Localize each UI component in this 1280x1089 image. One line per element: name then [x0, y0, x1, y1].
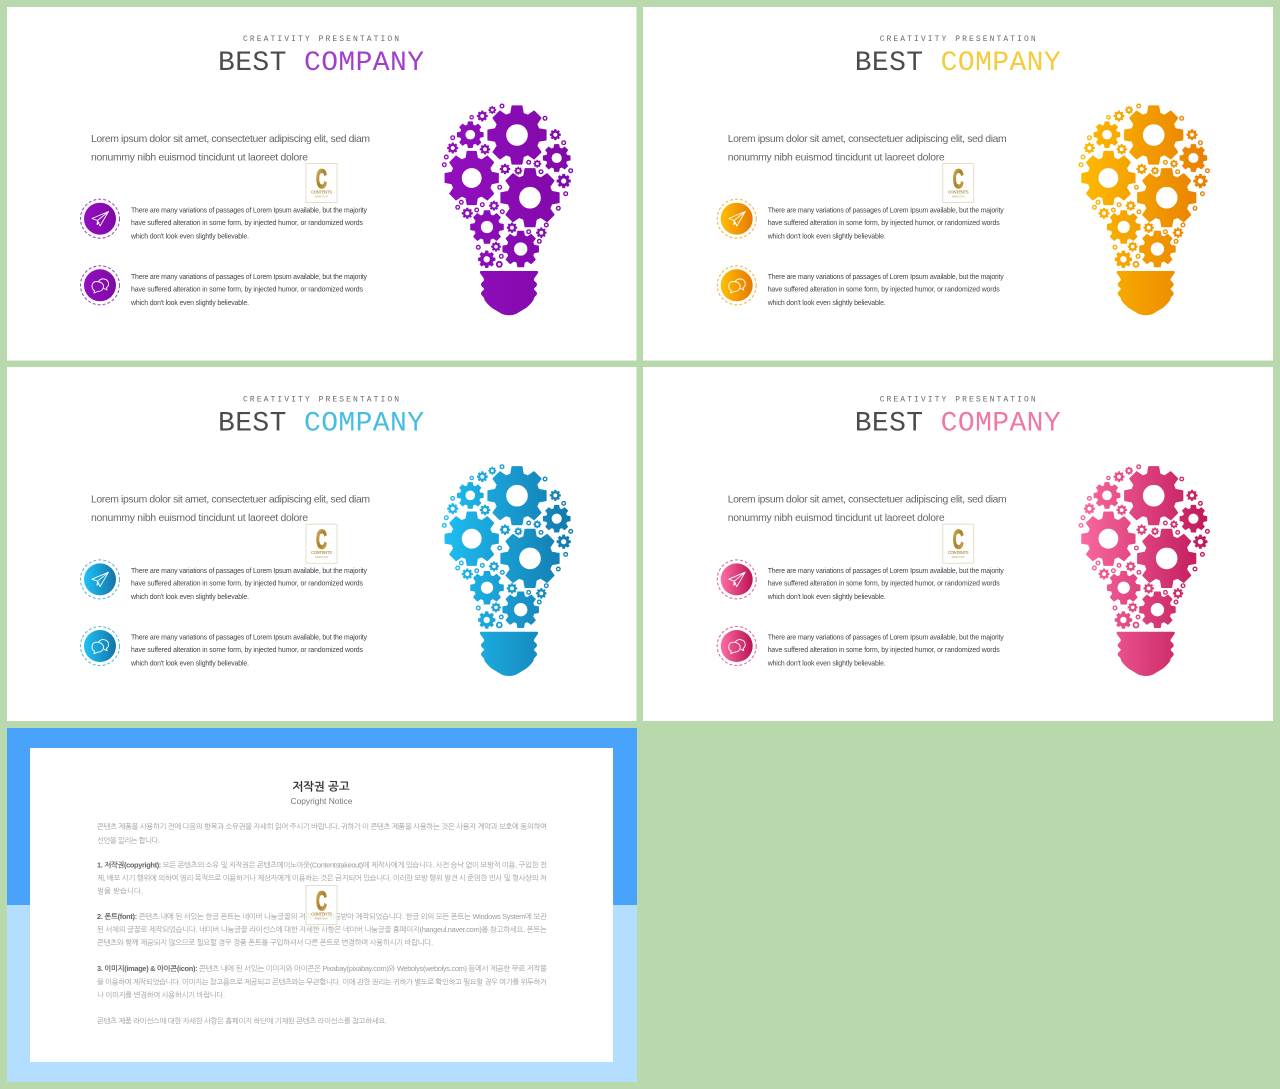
section: image and icon: 3. 이미지(image) & 아이콘(icon): 콘텐츠 내에 된 서있는 이미지와 아이콘은 Pixabay(pixabay.com)와 Webolys(webolys.com) 등에서 제공한 무료 저작물	[97, 964, 547, 973]
text block: first description: There are many variations of passages of Lorem Ipsum available, but the majority	[768, 207, 1004, 214]
section: font: 2. 폰트(font): 콘텐츠 내에 된 서있는 한글 폰트는 네이버 나눔글꼴의 저작물로 제공받아 제작되었습니다. 한글 외의 모든 폰트는 Windows System에 보관	[97, 912, 547, 921]
watermark logo: CONTENTS	[948, 190, 969, 194]
title: BEST COMPANY	[855, 48, 1061, 79]
watermark logo: C	[316, 164, 327, 194]
icon: paper plane	[80, 199, 120, 238]
slide background	[643, 367, 1273, 721]
slide background	[643, 7, 1273, 360]
intro paragraph: 콘텐츠 제품을 사용하기 전에 다음의 항목과 소유권을 자세히 읽어 주시기 바랍니다. 귀하가 이 콘텐츠 제품을 사용하는 것은 사용자 계약과 보호에 동의하여	[97, 822, 547, 831]
text block: first description: have suffered alteration in some form, by injected humor, or randomized words	[768, 220, 1000, 227]
section: copyright: 벌을 받습니다.	[97, 886, 143, 896]
lead paragraph	[91, 134, 370, 164]
notice heading: 저작권 공고	[292, 780, 350, 794]
icon: chat bubbles	[717, 626, 756, 666]
watermark logo: C	[953, 525, 964, 555]
icon: paper plane	[80, 560, 120, 599]
watermark logo: C	[316, 525, 327, 555]
watermark logo: C	[316, 886, 327, 916]
lead paragraph	[91, 495, 370, 524]
text block: second description	[130, 274, 368, 307]
intro paragraph: 선언을 알리는 합니다.	[97, 836, 160, 845]
watermark logo: CONTENTS	[311, 912, 332, 916]
text block: first description	[767, 207, 1004, 240]
lead paragraph	[728, 134, 1007, 164]
watermark logo	[306, 524, 337, 563]
title: BEST COMPANY	[855, 409, 1061, 440]
panel: copyright notice	[7, 728, 637, 1082]
text block: first description: have suffered alteration in some form, by injected humor, or randomized words	[131, 220, 364, 227]
section: font: 된 서체의 글꼴로 제작되었습니다. 네이버 나눔글꼴 라이선스에 대한 자세한 사항은 네이버 나눔글꼴 홈페이지(hangeul.naver.com)를 참고하세요. 폰트는	[97, 925, 547, 934]
text block: first description: which don't look even slightly believable.	[130, 233, 249, 240]
closing note: 콘텐츠 제품 라이선스에 대한 자세한 사항은 홈페이지 하단에 기재된 콘텐츠 라이선스를 참고하세요.	[97, 1016, 387, 1026]
notice subheading: Copyright Notice	[291, 796, 353, 806]
text block: first description: which don't look even slightly believable.	[130, 594, 249, 601]
text block: second description: have suffered alteration in some form, by injected humor, or randomized words	[768, 286, 1000, 294]
watermark logo: MAKE YOUR	[952, 194, 965, 198]
section: copyright	[97, 860, 547, 896]
text block: first description: which don't look even slightly believable.	[767, 233, 886, 240]
text block: first description: There are many variations of passages of Lorem Ipsum available, but the majority	[768, 568, 1004, 575]
panel: blue slide	[7, 367, 636, 721]
icon: chat bubbles	[80, 626, 120, 666]
watermark logo	[943, 164, 974, 202]
watermark logo: MAKE YOUR	[315, 555, 328, 559]
watermark logo: CONTENTS	[311, 190, 332, 194]
intro paragraph	[97, 822, 547, 845]
illustration: gear light bulb	[1078, 464, 1210, 676]
text block: second description: There are many variations of passages of Lorem Ipsum available, but the majority	[131, 274, 368, 281]
illustration: gear light bulb	[442, 464, 574, 676]
watermark logo: CONTENTS	[948, 550, 969, 555]
watermark logo: MAKE YOUR	[315, 916, 328, 920]
section: image and icon: 나 이미지를 변경하여 사용하시기 바랍니다.	[97, 990, 225, 1000]
watermark logo: C	[953, 164, 964, 194]
text block: first description: have suffered alteration in some form, by injected humor, or randomized words	[768, 581, 1000, 588]
watermark logo	[943, 524, 974, 563]
text block: second description: which don't look even slightly believable.	[767, 300, 886, 307]
text block: second description: There are many variations of passages of Lorem Ipsum available, but the majority	[768, 274, 1004, 281]
lead paragraph: Lorem ipsum dolor sit amet, consectetuer adipiscing elit, sed diam	[728, 495, 1007, 506]
slide background	[7, 367, 636, 721]
lead paragraph: Lorem ipsum dolor sit amet, consectetuer adipiscing elit, sed diam	[91, 134, 370, 145]
text block: first description	[130, 207, 368, 240]
lead paragraph: nonummy nibh euismod tincidunt ut laoreet dolore	[728, 152, 945, 164]
panel: pink slide	[643, 367, 1273, 721]
text block: second description	[767, 274, 1004, 307]
illustration: gear light bulb	[442, 104, 574, 316]
section: image and icon	[97, 964, 547, 1000]
text block: second description: which don't look even slightly believable.	[130, 300, 249, 307]
text block: second description: have suffered alteration in some form, by injected humor, or randomized words	[131, 286, 364, 294]
title: BEST COMPANY	[218, 48, 424, 79]
slide background	[7, 7, 636, 360]
text block: first description: which don't look even slightly believable.	[767, 594, 886, 601]
watermark logo: MAKE YOUR	[315, 194, 328, 198]
white notice card	[30, 748, 613, 1062]
illustration: gear light bulb	[1078, 104, 1210, 316]
icon: chat bubbles	[717, 266, 756, 305]
eyebrow text: CREATIVITY PRESENTATION	[243, 396, 399, 405]
watermark logo: CONTENTS	[311, 550, 332, 555]
watermark logo	[306, 164, 337, 202]
text block: second description	[767, 634, 1004, 668]
text block: second description: have suffered alteration in some form, by injected humor, or randomized words	[768, 647, 1000, 654]
text block: second description: There are many variations of passages of Lorem Ipsum available, but the majority	[131, 634, 368, 642]
text block: second description: have suffered alteration in some form, by injected humor, or randomized words	[131, 647, 364, 654]
icon: paper plane	[717, 560, 756, 599]
lead paragraph: Lorem ipsum dolor sit amet, consectetuer adipiscing elit, sed diam	[91, 495, 370, 506]
icon: paper plane	[717, 199, 756, 238]
text block: first description: There are many variations of passages of Lorem Ipsum available, but the majority	[131, 207, 368, 214]
eyebrow text: CREATIVITY PRESENTATION	[880, 35, 1036, 44]
text block: second description: There are many variations of passages of Lorem Ipsum available, but the majority	[768, 634, 1004, 642]
panel: purple slide	[7, 7, 636, 360]
section: image and icon: 을 이용하여 제작되었습니다. 이미지는 참고용으로 제공되고 콘텐츠와는 무관합니다. 이에 관한 권리는 귀하가 별도로 확인하고 필요할 경우 여기를 위두하거	[97, 978, 547, 986]
panel: orange slide	[643, 7, 1273, 360]
lead paragraph: nonummy nibh euismod tincidunt ut laoreet dolore	[728, 513, 945, 524]
section: copyright: 제, 배포 사기 행위에 의하여 영리 목적으로 이용하거나 제삼자에게 이용하는 것은 금지되어 있습니다. 이러한 모방 행위 발견 시 준엄한 민사 및 형사상의 처	[97, 874, 547, 882]
text block: first description: have suffered alteration in some form, by injected humor, or randomized words	[131, 581, 364, 588]
eyebrow text: CREATIVITY PRESENTATION	[243, 35, 399, 44]
section: copyright: 1. 저작권(copyright): 모든 콘텐츠의 소유 및 저작권은 콘텐츠메이노아웃(Contentstakeout)에 제작사에게 있습니다. 사전 승낙 없이 모방적 이용, 구입한 전	[97, 860, 547, 870]
section: font: 콘텐츠와 함께 제공되지 않으므로 필요할 경우 정품 폰트를 구입하셔서 다른 폰트로 변경하여 사용하시기 바랍니다.	[97, 938, 433, 947]
lead paragraph: nonummy nibh euismod tincidunt ut laoreet dolore	[91, 513, 308, 524]
section: font	[97, 912, 547, 947]
eyebrow text: CREATIVITY PRESENTATION	[880, 396, 1036, 405]
lead paragraph	[728, 495, 1007, 524]
title: BEST COMPANY	[218, 409, 424, 440]
backdrop: upper blue band	[7, 728, 637, 905]
lead paragraph: nonummy nibh euismod tincidunt ut laoreet dolore	[91, 152, 308, 164]
text block: first description: There are many variations of passages of Lorem Ipsum available, but the majority	[131, 568, 368, 575]
lead paragraph: Lorem ipsum dolor sit amet, consectetuer adipiscing elit, sed diam	[728, 134, 1007, 145]
text block: second description	[130, 634, 368, 668]
text block: second description: which don't look even slightly believable.	[130, 660, 249, 668]
backdrop: lower light blue band	[7, 905, 637, 1082]
text block: second description: which don't look even slightly believable.	[767, 660, 886, 668]
text block: first description	[767, 568, 1004, 601]
watermark logo: MAKE YOUR	[952, 555, 965, 559]
icon: chat bubbles	[80, 266, 120, 305]
watermark logo	[306, 886, 337, 924]
text block: first description	[130, 568, 368, 601]
